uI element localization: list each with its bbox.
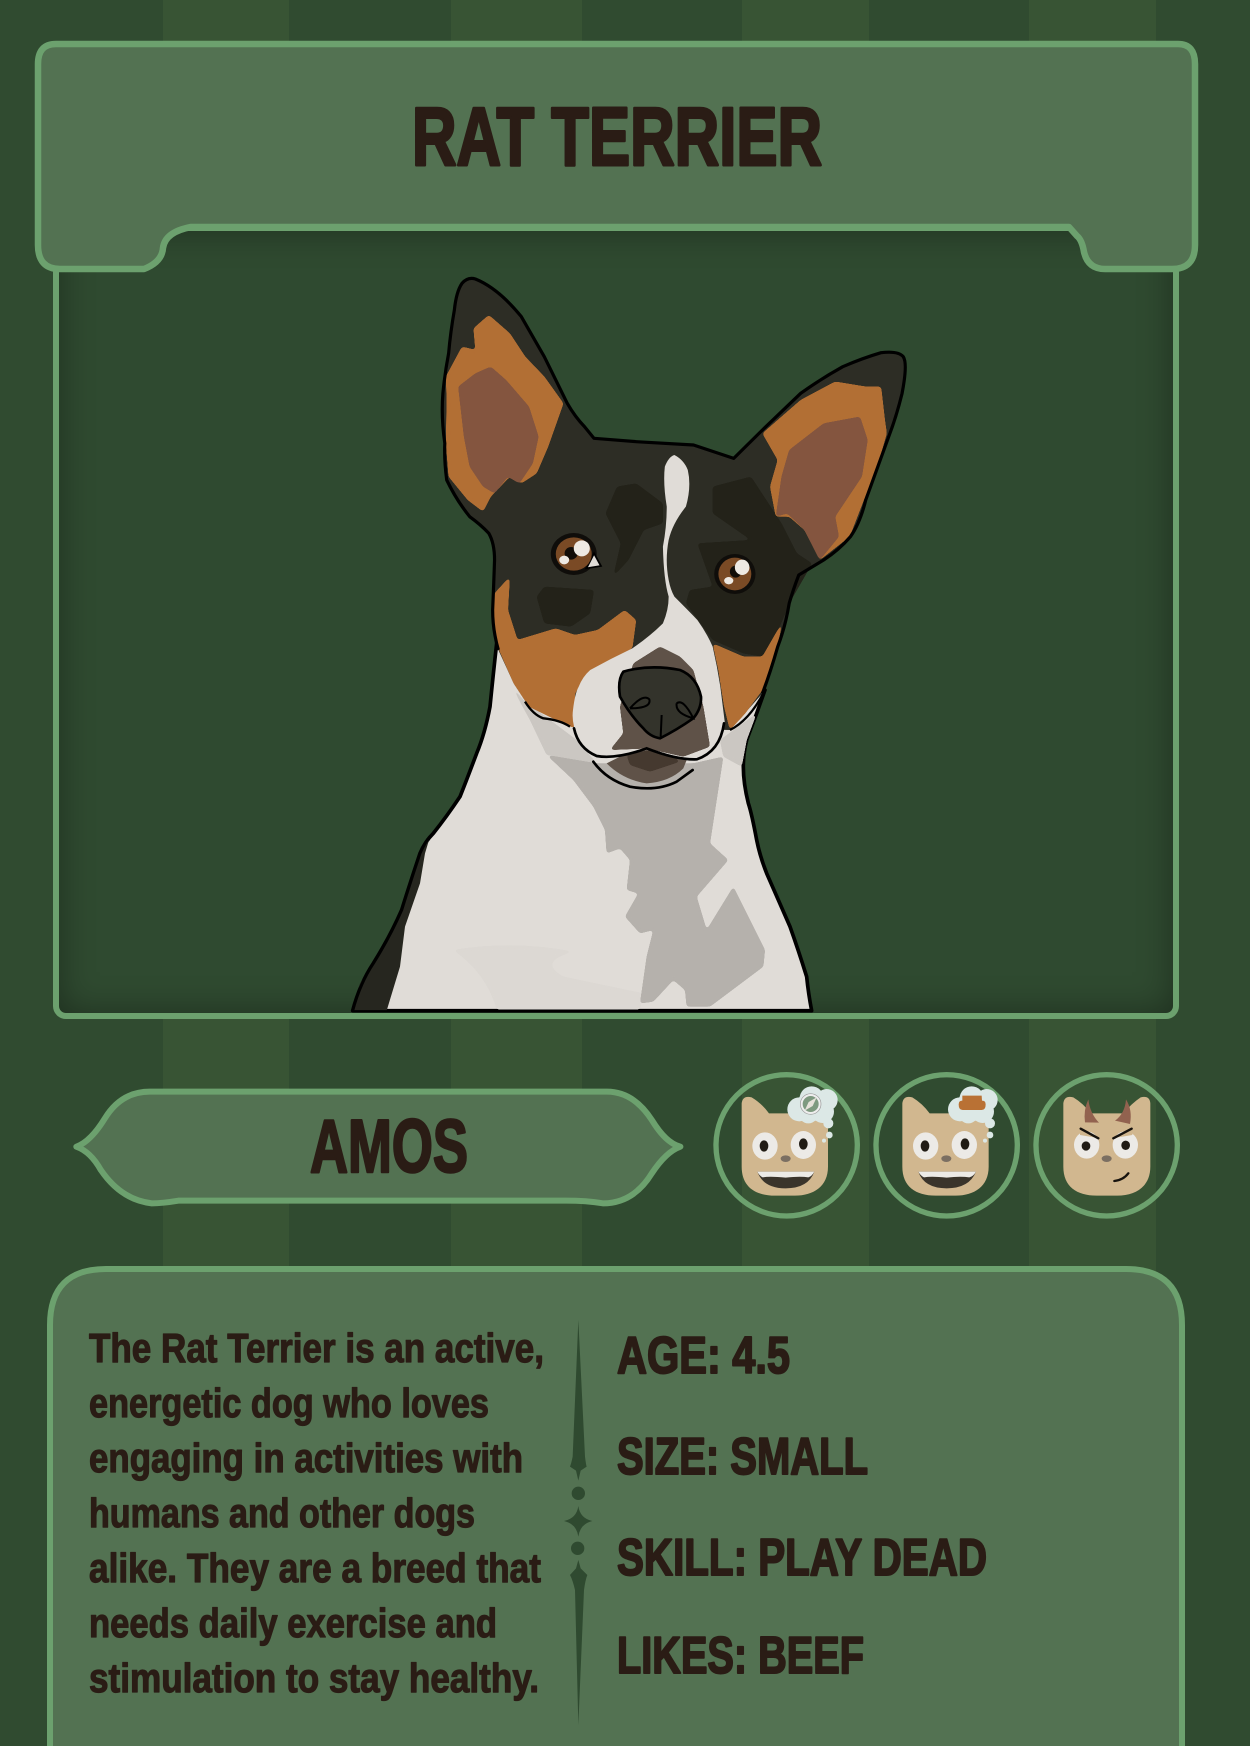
dark fur patches [606,483,663,577]
description text: energetic dog who loves [89,1380,489,1426]
trait icons [716,1075,1177,1216]
stats list: SIZE: SMALL [617,1428,868,1486]
dog head [442,278,905,757]
description text: engaging in activities with [89,1435,523,1481]
dog body [352,640,812,1011]
icon: curious cat with compass thought [716,1075,857,1216]
left ear inner [446,315,563,512]
stats list: AGE: 4.5 [617,1327,790,1385]
title: RAT TERRIER [412,90,822,183]
header panel [38,44,1195,269]
description text: The Rat Terrier is an active, [89,1325,544,1371]
description text: alike. They are a breed that [89,1545,541,1591]
info panel [50,1269,1182,1746]
right ear inner [762,382,887,560]
dog eyes and head outline [442,278,905,693]
pet name: AMOS [310,1104,468,1188]
description text: stimulation to stay healthy. [89,1655,539,1701]
ornamental divider [564,1320,592,1725]
white blaze and muzzle [573,455,725,757]
stats list [617,1327,987,1685]
icon: cat with couch thought [876,1075,1017,1216]
icon: mischievous cat with horns [1036,1075,1177,1216]
description text [89,1325,544,1701]
name banner [76,1092,680,1203]
stats list: SKILL: PLAY DEAD [617,1529,987,1587]
stats list: LIKES: BEEF [617,1627,864,1685]
description text: humans and other dogs [89,1490,475,1536]
portrait frame [53,225,1179,1019]
dog illustration [352,278,905,1011]
nose and mouth [525,647,765,788]
description text: needs daily exercise and [89,1600,497,1646]
cheeks [493,577,636,728]
